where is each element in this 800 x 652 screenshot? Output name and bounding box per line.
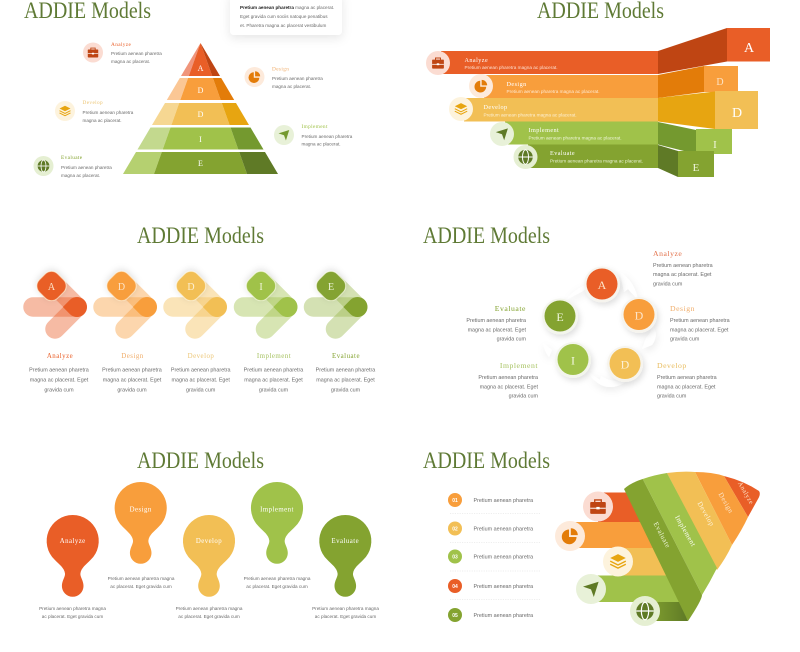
- text: Develop: gravida cum: [657, 394, 687, 400]
- item: Analyze: Analyze: [111, 42, 132, 48]
- list item 01: Pretium aenean pharetra: [474, 498, 533, 504]
- arrow card: Design: [102, 268, 162, 394]
- arrow card: Implement: Pretium aenean pharetra: [244, 368, 303, 374]
- node: D develop: D: [621, 358, 630, 372]
- ribbon: Design: [469, 66, 738, 98]
- item: Evaluate: magna ac placerat.: [61, 173, 100, 178]
- arrow card: Analyze: gravida cum: [44, 388, 74, 394]
- level I: [138, 128, 264, 150]
- arrow card: Evaluate: magna ac placerat. Eget: [316, 378, 375, 384]
- band: Develop: [667, 472, 732, 570]
- text: Develop: magna ac placerat. Eget: [657, 384, 716, 390]
- pin: Develop: ac placerat. Eget gravida cum: [178, 614, 240, 619]
- arrow card: Analyze: magna ac placerat. Eget: [30, 378, 89, 384]
- arrow card: Evaluate: E: [328, 282, 334, 293]
- fan chart: [555, 472, 760, 626]
- ribbon: Analyze: A: [744, 41, 755, 56]
- list item 04: 04: [452, 584, 458, 590]
- text: Design: gravida cum: [670, 336, 700, 342]
- list item 04: [448, 579, 533, 593]
- node: E: E: [556, 310, 564, 324]
- band label: Develop: Develop: [695, 500, 716, 528]
- callout card: Pretium aenean pharetra magna ac placerat.: [240, 5, 334, 10]
- text: Design: Pretium aenean pharetra: [670, 318, 730, 324]
- ribbon: Design: Pretium aenean pharetra magna ac placerat.: [506, 89, 600, 94]
- arrow card: Analyze: Pretium aenean pharetra: [29, 368, 89, 374]
- text: Implement: magna ac placerat. Eget: [480, 384, 538, 390]
- item: Develop: Develop: [82, 100, 103, 106]
- item: Design: [244, 66, 323, 89]
- arrow card: Design: magna ac placerat. Eget: [103, 378, 162, 384]
- cycle arrows: [543, 272, 656, 387]
- arrow card: Develop: Pretium aenean pharetra: [171, 368, 231, 374]
- pin: Design: Design: [130, 506, 152, 514]
- ribbon: Evaluate: Pretium aenean pharetra magna ac placerat.: [550, 158, 643, 164]
- text: Develop: [657, 361, 717, 400]
- pin: Analyze: [39, 515, 106, 619]
- list item 04: Pretium aenean pharetra: [474, 584, 533, 590]
- pin: Evaluate: [312, 515, 379, 619]
- arrow card: Design: gravida cum: [117, 388, 147, 394]
- item: Evaluate: [34, 155, 112, 178]
- text: Implement: gravida cum: [509, 394, 538, 400]
- pin: Evaluate: Evaluate: [332, 538, 359, 545]
- ribbon: Develop: [449, 91, 758, 129]
- band label: Analyze: Analyze: [736, 481, 755, 506]
- text: Design: Design: [670, 304, 695, 313]
- level E: [123, 152, 278, 174]
- strip: Develop: [618, 548, 675, 576]
- band label: Implement: Implement: [673, 514, 697, 548]
- text: Develop: Pretium aenean pharetra: [657, 375, 717, 381]
- ribbon: Develop: Develop: [484, 104, 508, 111]
- ribbon: Implement: Pretium aenean pharetra magna ac placerat.: [528, 136, 622, 140]
- node: A: A: [598, 278, 607, 292]
- panel: pyramid: [24, 0, 353, 178]
- ribbon: Implement: [490, 122, 732, 154]
- arrow card: Evaluate: Evaluate: [332, 353, 360, 360]
- strip: Implement: [591, 576, 685, 602]
- callout card: [230, 0, 342, 35]
- level D design: D: [198, 86, 204, 95]
- ribbon: Design: D: [716, 77, 724, 88]
- item: Analyze: Pretium aenean pharetra: [111, 51, 162, 56]
- text: Evaluate: gravida cum: [497, 336, 526, 342]
- pin: Analyze: Pretium aenean pharetra magna: [39, 606, 106, 611]
- level A: A: [198, 64, 204, 73]
- icon: paper plane: [576, 574, 606, 604]
- arrow card: Develop: gravida cum: [186, 388, 216, 394]
- panel: 3D ribbons: [426, 0, 770, 177]
- pin: Evaluate: Pretium aenean pharetra magna: [312, 606, 379, 611]
- pin: Design: Pretium aenean pharetra magna: [108, 576, 175, 581]
- level D develop: D: [198, 110, 204, 119]
- arrow card: Implement: Implement: [257, 353, 291, 360]
- pyramid chart: [123, 43, 278, 174]
- level I: I: [199, 135, 202, 144]
- level D design: [167, 78, 234, 100]
- strip: Evaluate: [645, 602, 688, 621]
- icon: pie chart: [555, 521, 585, 551]
- pin: Implement: ac placerat. Eget gravida cum: [246, 584, 308, 589]
- arrow card: Implement: [243, 268, 303, 394]
- arrow card: Implement: I: [259, 282, 263, 293]
- item: Develop: magna ac placerat.: [82, 118, 122, 123]
- text: Analyze: Analyze: [653, 249, 682, 258]
- pin: Design: [108, 482, 175, 589]
- list item 01: [448, 493, 533, 507]
- pin: Develop: Develop: [196, 538, 222, 545]
- text: Analyze: [653, 249, 713, 288]
- ribbon: Develop: Pretium aenean pharetra magna ac placerat.: [484, 112, 577, 118]
- list item 03: 03: [452, 554, 458, 560]
- band: Implement: [643, 473, 717, 595]
- item: Evaluate: Evaluate: [61, 155, 83, 161]
- item: Design: Design: [272, 66, 289, 72]
- item: Implement: Pretium aenean pharetra: [302, 134, 353, 139]
- arrow card: Design: D: [118, 282, 125, 293]
- item: Implement: [274, 124, 353, 146]
- pin: Implement: Implement: [260, 506, 294, 514]
- text: Analyze: Pretium aenean pharetra: [653, 263, 713, 269]
- text: Evaluate: Evaluate: [495, 304, 526, 313]
- text: Develop: Develop: [657, 361, 687, 370]
- list item 03: [448, 550, 533, 564]
- pin: Implement: [244, 482, 311, 589]
- item: Implement: magna ac placerat.: [302, 142, 341, 146]
- arrow card: Evaluate: Pretium aenean pharetra: [316, 368, 375, 374]
- text: Design: [670, 304, 730, 342]
- text: Evaluate: [466, 304, 526, 342]
- arrow card: Design: Pretium aenean pharetra: [102, 368, 162, 374]
- ribbon: Implement: I: [713, 139, 717, 151]
- pin: Design: ac placerat. Eget gravida cum: [110, 584, 172, 589]
- ribbon: Implement: Implement: [528, 127, 559, 134]
- text: Evaluate: Pretium aenean pharetra: [466, 318, 526, 324]
- ribbon: Analyze: Analyze: [464, 57, 488, 64]
- text: Implement: Pretium aenean pharetra: [478, 375, 538, 381]
- text: Analyze: gravida cum: [653, 282, 683, 288]
- panel: arrows row: [29, 223, 375, 394]
- pin: Implement: Pretium aenean pharetra magna: [244, 576, 311, 581]
- ribbon: Evaluate: [514, 144, 714, 177]
- arrow card: Analyze: [29, 268, 89, 394]
- list item 02: 02: [452, 526, 458, 532]
- band: Evaluate: [624, 479, 702, 621]
- text: Design: magna ac placerat. Eget: [670, 328, 729, 334]
- pin: Analyze: Analyze: [60, 538, 86, 545]
- panel: pins: [39, 448, 379, 619]
- title: ADDIE Models: [137, 223, 264, 248]
- arrow card: Develop: Develop: [188, 353, 214, 360]
- arrow card: Develop: [171, 268, 231, 394]
- node: D develop: [607, 346, 643, 382]
- node: I: [555, 342, 591, 378]
- pin: Develop: Pretium aenean pharetra magna: [176, 606, 243, 611]
- list item 01: 01: [452, 498, 458, 504]
- level D develop: [152, 103, 249, 125]
- item: Analyze: magna ac placerat.: [111, 59, 150, 64]
- callout card: et. Pharetra magna ac placerat vestibulum: [240, 23, 326, 28]
- list item 05: Pretium aenean pharetra: [474, 613, 533, 619]
- callout card: Eget gravida cum sociis natoque penatibus: [240, 14, 328, 19]
- item: Design: Pretium aenean pharetra: [272, 76, 323, 81]
- arrow card: Implement: gravida cum: [259, 388, 289, 394]
- pin: Develop: [176, 515, 243, 619]
- panel: fan: [423, 448, 760, 626]
- pin: Evaluate: ac placerat. Eget gravida cum: [315, 614, 376, 619]
- node: E: [542, 298, 578, 334]
- list item 05: 05: [452, 613, 458, 619]
- panel: cycle: [423, 223, 730, 400]
- ribbon: Evaluate: Evaluate: [550, 150, 575, 157]
- text: Evaluate: magna ac placerat. Eget: [468, 328, 526, 334]
- pin: Analyze: ac placerat. Eget gravida cum: [42, 614, 103, 619]
- node: D design: [621, 297, 657, 333]
- level A: [181, 43, 220, 76]
- icon: briefcase: [583, 492, 613, 522]
- arrow card: Implement: magna ac placerat. Eget: [244, 378, 303, 384]
- strip: Design: [570, 522, 660, 548]
- text: Implement: Implement: [500, 361, 538, 370]
- item: Develop: [55, 100, 134, 123]
- item: Evaluate: Pretium aenean pharetra: [61, 165, 112, 170]
- arrow card: Analyze: A: [48, 282, 56, 293]
- text: Analyze: magna ac placerat. Eget: [653, 272, 712, 278]
- band: Design: [695, 472, 748, 545]
- band label: Design: Design: [717, 491, 735, 515]
- title: ADDIE Models: [137, 448, 264, 473]
- list item 03: Pretium aenean pharetra: [474, 554, 533, 560]
- arrow card: Evaluate: [313, 268, 375, 394]
- icon: layers: [603, 546, 633, 576]
- strip: Analyze: [598, 492, 645, 522]
- item: Implement: Implement: [302, 124, 328, 130]
- title: ADDIE Models: [423, 448, 550, 473]
- band label: Evaluate: Evaluate: [652, 521, 672, 549]
- band: Analyze: [724, 476, 760, 517]
- item: Analyze: [83, 42, 162, 64]
- text: Implement: [478, 361, 538, 400]
- ribbon: Analyze: Pretium aenean pharetra magna ac placerat.: [464, 65, 558, 70]
- list item 02: Pretium aenean pharetra: [474, 526, 533, 532]
- ribbon: Develop: D: [732, 106, 742, 121]
- icon: globe: [630, 596, 660, 626]
- node: D design: D: [635, 308, 644, 322]
- list item 05: [448, 608, 533, 622]
- ribbon: Design: Design: [506, 81, 527, 88]
- arrow card: Evaluate: gravida cum: [331, 388, 361, 394]
- title: ADDIE Models: [423, 223, 550, 248]
- list item 02: [448, 522, 533, 536]
- arrow card: Design: Design: [121, 353, 144, 360]
- numbered list: [448, 493, 541, 622]
- arrow card: Develop: D: [187, 282, 195, 293]
- arrow card: Develop: magna ac placerat. Eget: [171, 378, 230, 384]
- ribbon: Analyze: [426, 28, 770, 75]
- item: Design: magna ac placerat.: [272, 84, 311, 89]
- ribbon: Evaluate: E: [693, 162, 700, 174]
- level E: E: [198, 159, 203, 168]
- arrow card: Analyze: Analyze: [47, 353, 73, 360]
- node: A: [584, 266, 620, 302]
- node: I: I: [571, 354, 575, 368]
- item: Develop: Pretium aenean pharetra: [82, 110, 134, 115]
